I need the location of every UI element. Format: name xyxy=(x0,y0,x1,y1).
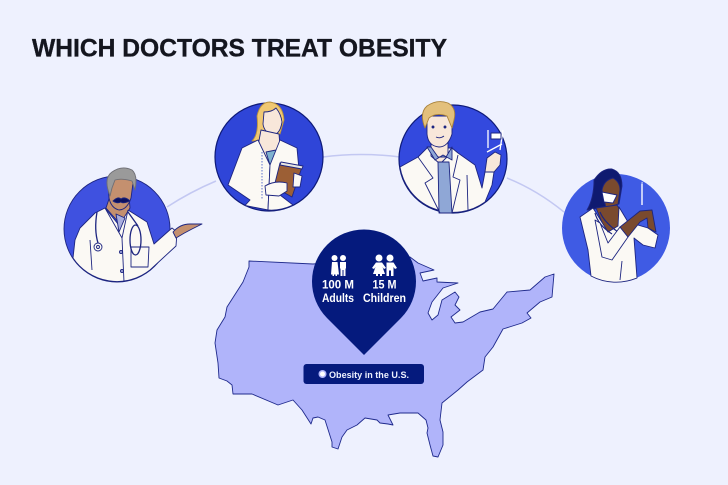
map: United States xyxy=(215,257,554,457)
stat: 15 M Children xyxy=(363,278,406,305)
legend label xyxy=(304,364,424,384)
legend label: Obesity in the U.S. xyxy=(329,370,409,381)
stat: 100 M Adults: Adults xyxy=(322,293,354,305)
doctor 3: man holding dental tool xyxy=(399,102,507,213)
doctor 1: older man with stethoscope xyxy=(64,168,202,282)
stat: 15 M Children: Children xyxy=(363,293,406,305)
icon: children xyxy=(372,254,397,276)
map pin xyxy=(312,229,416,355)
doctor 2: woman with clipboard xyxy=(215,102,323,211)
title: WHICH DOCTORS TREAT OBESITY xyxy=(32,34,447,62)
icon: adults xyxy=(331,255,346,276)
stat: 100 M Adults: 100 M xyxy=(322,278,354,292)
stat: 100 M Adults xyxy=(322,278,354,305)
doctor 4: masked woman with syringe xyxy=(562,169,670,282)
stat: 15 M Children: 15 M xyxy=(372,278,396,292)
connecting arc xyxy=(167,154,564,212)
